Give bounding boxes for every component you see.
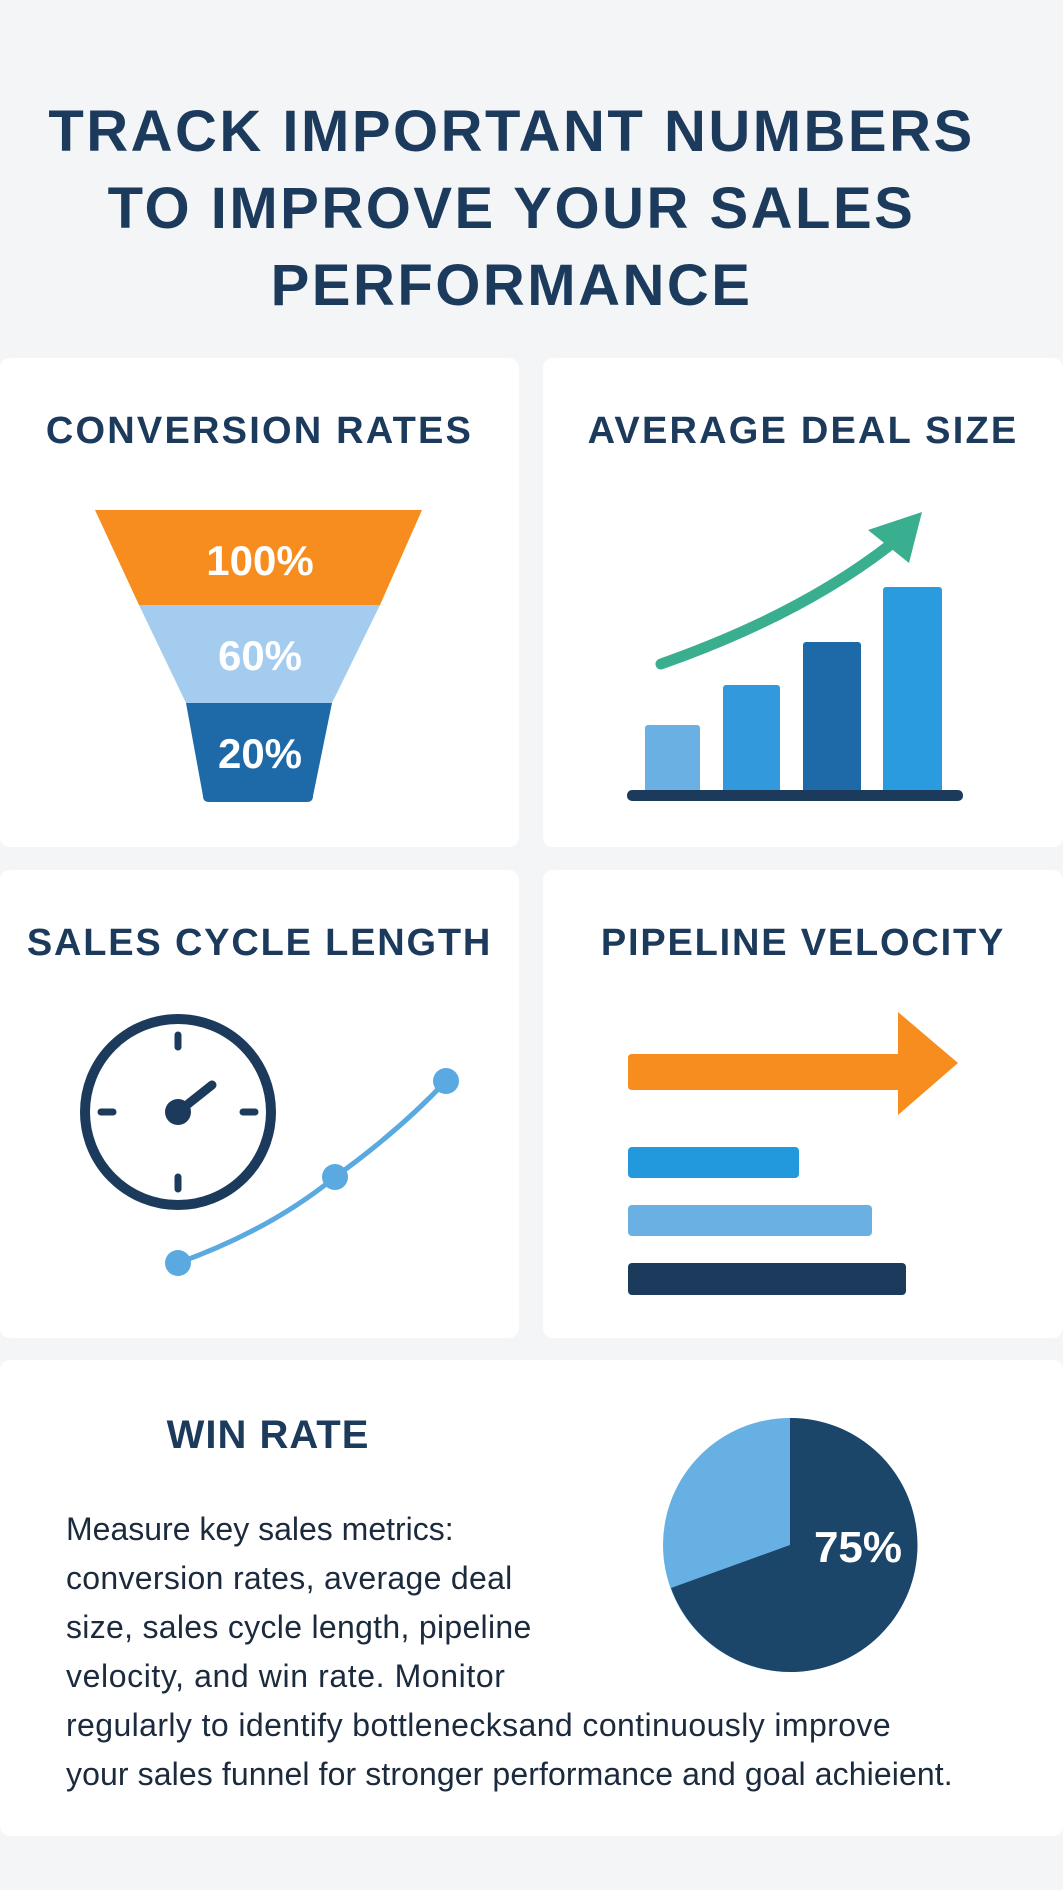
title: PERFORMANCE xyxy=(271,253,752,318)
title: TO IMPROVE YOUR SALES xyxy=(108,176,915,241)
title: TRACK IMPORTANT NUMBERS xyxy=(48,99,975,164)
panel: conversion rates xyxy=(0,358,519,847)
funnel chart: 100% xyxy=(206,537,314,584)
funnel chart: 60% xyxy=(218,632,302,679)
paragraph: your sales funnel for stronger performance and goal achieient. xyxy=(66,1756,953,1792)
paragraph: Measure key sales metrics: xyxy=(66,1511,454,1547)
bar chart with growth arrow xyxy=(627,512,963,801)
panel: sales cycle length xyxy=(0,870,519,1338)
panel: pipeline velocity xyxy=(543,870,1063,1338)
funnel chart: 20% xyxy=(218,730,302,777)
paragraph: velocity, and win rate. Monitor xyxy=(66,1658,506,1694)
icon: clock xyxy=(85,1019,271,1205)
paragraph: conversion rates, average deal xyxy=(66,1560,513,1596)
panel: average deal size xyxy=(543,358,1063,847)
pie chart: 75% xyxy=(814,1523,902,1572)
line chart xyxy=(165,1068,459,1276)
paragraph: size, sales cycle length, pipeline xyxy=(66,1609,532,1645)
heading: win rate: WIN RATE xyxy=(167,1413,369,1457)
panel: win rate xyxy=(0,1360,1063,1836)
arrow and bars: pipeline velocity xyxy=(628,1012,958,1295)
paragraph xyxy=(66,1511,953,1792)
pie chart xyxy=(663,1418,917,1672)
paragraph: regularly to identify bottlenecksand continuously improve xyxy=(66,1707,891,1743)
title xyxy=(48,99,975,318)
heading: sales cycle length: SALES CYCLE LENGTH xyxy=(27,922,492,964)
heading: conversion rates: CONVERSION RATES xyxy=(46,410,473,452)
heading: pipeline velocity: PIPELINE VELOCITY xyxy=(601,922,1005,964)
heading: average deal size: AVERAGE DEAL SIZE xyxy=(588,410,1018,452)
funnel chart xyxy=(95,510,422,802)
